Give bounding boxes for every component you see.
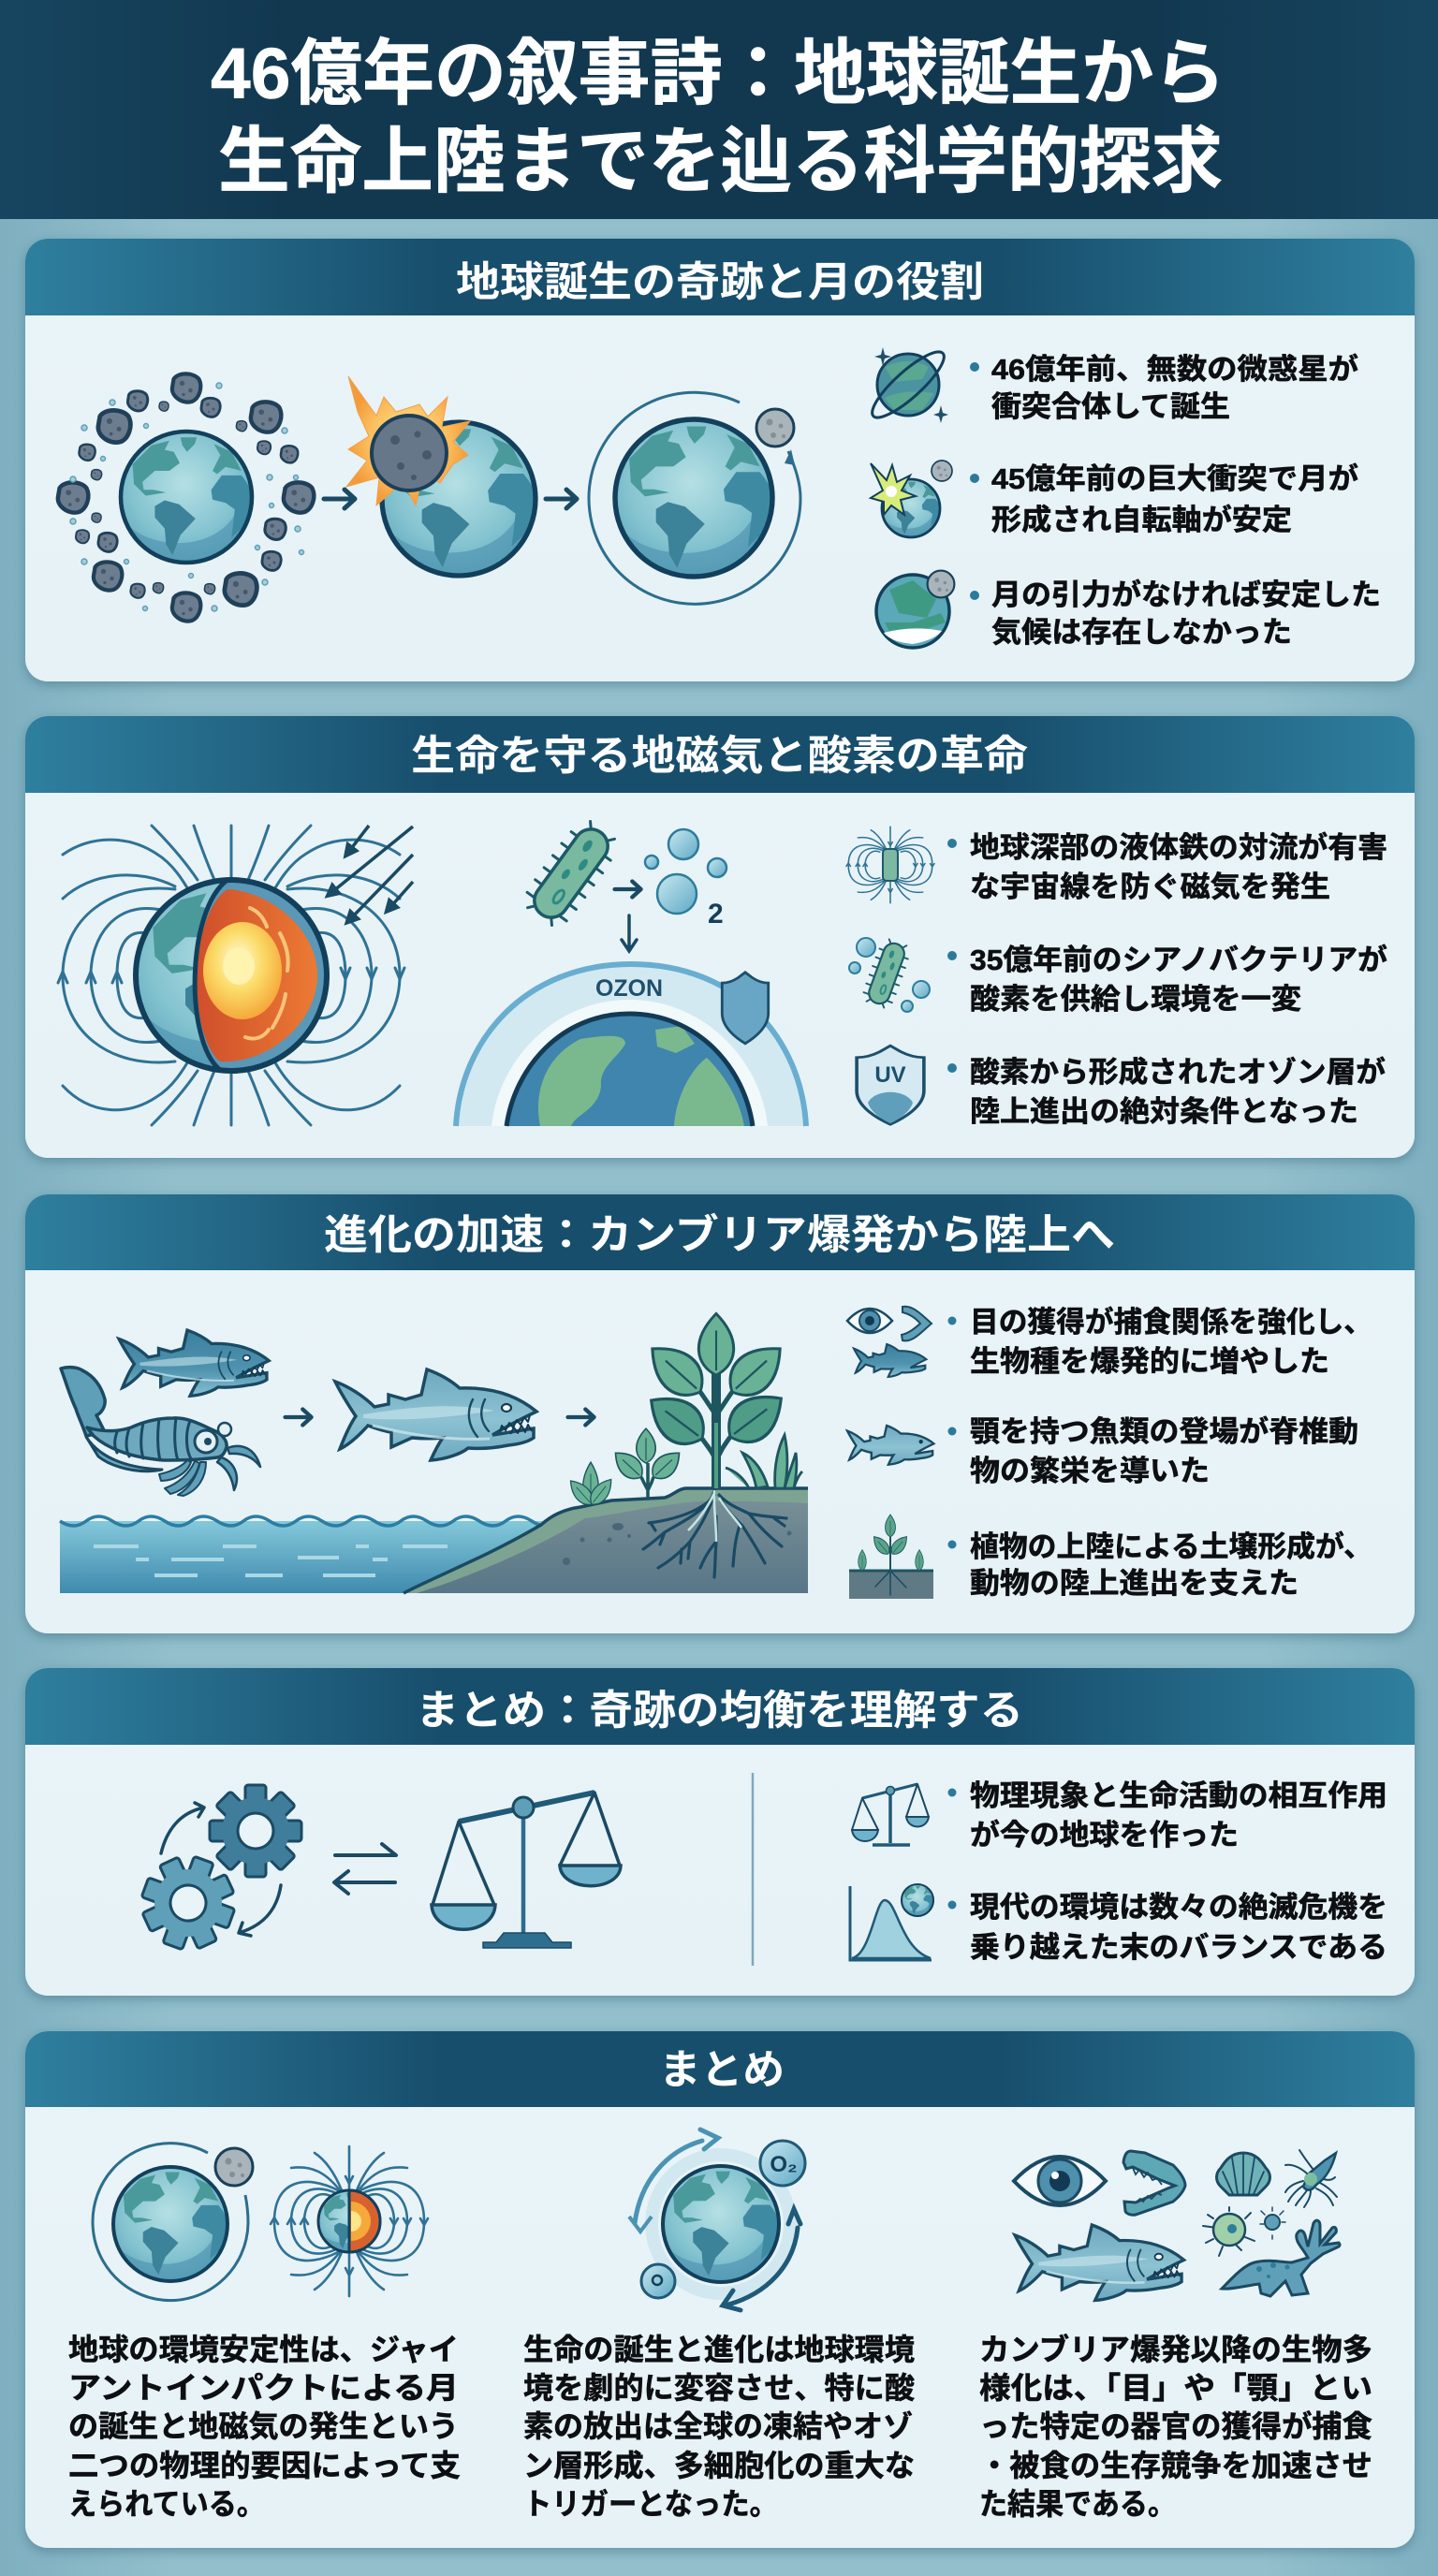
- illustration: cyanobacteria: [520, 815, 623, 931]
- arrow: [546, 490, 577, 508]
- bullet: [970, 474, 979, 483]
- item text: 物の繁栄を導いた: [970, 1455, 1210, 1487]
- item text: 乗り越えた末のバランスである: [970, 1931, 1387, 1964]
- illustration: Earth oxygen cycle: O₂: [770, 2152, 798, 2177]
- illustration: planetesimals around Earth: [58, 373, 314, 622]
- text column: life and evolution: [523, 2333, 915, 2521]
- text column: life and evolution: トリガーとなった。: [523, 2487, 778, 2521]
- illustration: roots: [643, 1490, 786, 1577]
- list item: land plants: [849, 1515, 1372, 1600]
- item text: 酸素を供給し環境を一変: [970, 983, 1301, 1016]
- bullet: [947, 1316, 957, 1325]
- illustration: Earth with Moon orbit: [589, 392, 800, 604]
- bullet: [970, 362, 979, 372]
- panel: summary balance: [25, 1668, 1415, 1996]
- title text: 生命上陸までを辿る科学的探求: [218, 122, 1223, 202]
- heading: 進化の加速：カンブリア爆発から陸上へ: [324, 1212, 1115, 1258]
- icon: eye, jaw, fish: [847, 1307, 932, 1377]
- text column: environmental stability: 地球の環境安定性は、ジャイ: [68, 2333, 459, 2366]
- illustration: shore with water: [60, 1313, 808, 1593]
- item text: 気候は存在しなかった: [991, 616, 1292, 649]
- illustration: Earth and Moon orbit: [93, 2144, 253, 2301]
- illustration: ozone layer: [454, 962, 808, 1126]
- text column: life and evolution: 境を劇的に変容させ、特に酸: [523, 2371, 915, 2405]
- bullet: [947, 951, 957, 960]
- list item: cyanobacteria: [849, 937, 1387, 1016]
- list item: jawed fish: [847, 1415, 1358, 1487]
- heading: まとめ: [659, 2047, 785, 2093]
- illustration: fish: [1015, 2225, 1184, 2301]
- arrow: [622, 915, 637, 951]
- item text: が今の地球を作った: [970, 1819, 1239, 1852]
- item text: 植物の上陸による土壌形成が、: [970, 1530, 1372, 1563]
- list item: interaction: [852, 1779, 1387, 1852]
- list item: planetesimals: [864, 344, 1358, 426]
- panel: birth of Earth and the Moon: [25, 239, 1415, 681]
- illustration: shark: [119, 1330, 269, 1396]
- item text: [970, 1306, 1372, 1378]
- icon: plant and soil: [849, 1515, 933, 1599]
- panel: magnetic field and oxygen: [25, 716, 1415, 1158]
- item text: な宇宙線を防ぐ磁気を発生: [970, 871, 1330, 903]
- text column: environmental stability: の誕生と地磁気の発生という: [68, 2409, 459, 2443]
- text column: life and evolution: ン層形成、多細胞化の重大な: [523, 2449, 915, 2482]
- icon: fish: [847, 1426, 933, 1465]
- illustration: giant impact: [346, 376, 536, 576]
- icon: UV shield: [857, 1046, 924, 1124]
- illustration: jaw: [1123, 2151, 1185, 2215]
- item text: 45億年前の巨大衝突で月が: [991, 462, 1358, 495]
- illustration: jawed fish: [335, 1369, 536, 1460]
- item text: 酸素から形成されたオゾン層が: [970, 1056, 1386, 1089]
- illustration: balance scale: [432, 1793, 621, 1948]
- text column: biodiversity: [979, 2333, 1372, 2521]
- arrow: [568, 1410, 594, 1425]
- text column: biodiversity: った特定の器官の獲得が捕食: [979, 2409, 1372, 2443]
- icon: UV shield: UV: [874, 1062, 906, 1088]
- icon: scale: [852, 1784, 929, 1845]
- illustration: oxygen bubbles: [645, 829, 726, 929]
- icon: shield: [722, 973, 769, 1044]
- heading: まとめ：奇跡の均衡を理解する: [416, 1688, 1023, 1734]
- text column: environmental stability: [68, 2333, 461, 2521]
- item text: [970, 1056, 1386, 1128]
- icon: impact: [871, 461, 952, 537]
- text column: environmental stability: えられている。: [68, 2487, 265, 2521]
- item text: 35億年前のシアノバクテリアが: [970, 944, 1387, 976]
- bullet: [947, 839, 957, 848]
- list item: liquid iron: [846, 827, 1387, 903]
- list item: lunar gravity: [876, 571, 1381, 649]
- bullet: [947, 1900, 957, 1910]
- item text: [970, 1779, 1387, 1852]
- illustration: Cambrian arthropod: [61, 1368, 260, 1496]
- label: OZON: OZON: [595, 975, 663, 1002]
- heading: 生命を守る地磁気と酸素の革命: [411, 733, 1028, 779]
- illustration: squid: [1285, 2150, 1337, 2207]
- illustration: Earth oxygen cycle: [629, 2130, 805, 2310]
- illustration: shell: [1217, 2153, 1269, 2195]
- item text: [970, 944, 1387, 1016]
- text column: life and evolution: 素の放出は全球の凍結やオゾ: [523, 2409, 913, 2443]
- title banner: [0, 0, 1438, 219]
- item text: 衝突合体して誕生: [991, 390, 1230, 423]
- illustration: microbes: [1203, 2207, 1285, 2256]
- item text: 生物種を爆発的に増やした: [970, 1345, 1329, 1378]
- illustration: gears: [129, 1785, 301, 1962]
- illustration: oxygen bubbles: 2: [708, 899, 724, 929]
- list item: eyes: [847, 1306, 1372, 1378]
- bullet: [970, 591, 979, 600]
- icon: magnet field: [846, 827, 934, 903]
- item text: 地球深部の液体鉄の対流が有害: [970, 831, 1387, 864]
- item text: [991, 353, 1358, 423]
- heading: 地球誕生の奇跡と月の役割: [456, 259, 984, 305]
- bullet: [947, 1427, 957, 1436]
- icon: ringed planet: [864, 344, 952, 426]
- arrow: [324, 490, 355, 508]
- item text: 月の引力がなければ安定した: [991, 578, 1381, 611]
- list item: giant impact: [871, 461, 1358, 537]
- item text: 現代の環境は数々の絶滅危機を: [970, 1891, 1387, 1924]
- illustration: small magnetic field: [271, 2146, 428, 2296]
- text column: biodiversity: カンブリア爆発以降の生物多: [979, 2333, 1372, 2366]
- divider: [752, 1773, 754, 1966]
- text column: environmental stability: アントインパクトによる月: [68, 2371, 459, 2405]
- title text: 46億年の叙事詩：地球誕生から: [211, 34, 1225, 114]
- arrow: [615, 882, 641, 897]
- text column: biodiversity: ・被食の生存競争を加速させ: [979, 2449, 1372, 2482]
- bullet: [947, 1541, 957, 1548]
- item text: [991, 578, 1381, 649]
- item text: 形成され自転軸が安定: [991, 504, 1292, 536]
- text column: biodiversity: 様化は、「目」や「顎」とい: [979, 2371, 1372, 2405]
- item text: 46億年前、無数の微惑星が: [991, 353, 1358, 386]
- illustration: plant: [565, 1313, 802, 1509]
- arrow: [286, 1410, 312, 1425]
- bullet: [947, 1063, 957, 1073]
- item text: 目の獲得が捕食関係を強化し、: [970, 1306, 1372, 1339]
- item text: 陸上進出の絶対条件となった: [970, 1095, 1358, 1128]
- arrows: exchange: [334, 1844, 396, 1894]
- bullet: [947, 1788, 957, 1797]
- illustration: eye: [1014, 2157, 1106, 2205]
- panel: conclusions: [25, 2031, 1415, 2548]
- text column: life and evolution: 生命の誕生と進化は地球環境: [523, 2333, 915, 2366]
- item text: 動物の陸上進出を支えた: [970, 1567, 1299, 1600]
- item text: 物理現象と生命活動の相互作用: [970, 1779, 1387, 1812]
- item text: [991, 462, 1358, 536]
- illustration: sea creature: [1222, 2220, 1340, 2296]
- text column: environmental stability: 二つの物理的要因によって支: [68, 2449, 461, 2482]
- icon: curve with Earth: [850, 1884, 933, 1960]
- panel: evolution acceleration: [25, 1194, 1415, 1633]
- icon: Earth and Moon: [876, 571, 954, 648]
- list item: ozone: [857, 1046, 1386, 1128]
- item text: [970, 1891, 1387, 1964]
- item text: [970, 831, 1387, 903]
- illustration: cosmic rays: [333, 826, 413, 917]
- illustration: geomagnetic field: [58, 826, 404, 1125]
- title text: [211, 34, 1225, 202]
- list item: mass extinction: [850, 1884, 1387, 1964]
- item text: [970, 1530, 1372, 1600]
- item text: 顎を持つ魚類の登場が脊椎動: [970, 1415, 1358, 1448]
- text column: biodiversity: た結果である。: [979, 2487, 1176, 2521]
- icon: bacterium: [849, 937, 930, 1012]
- item text: [970, 1415, 1358, 1487]
